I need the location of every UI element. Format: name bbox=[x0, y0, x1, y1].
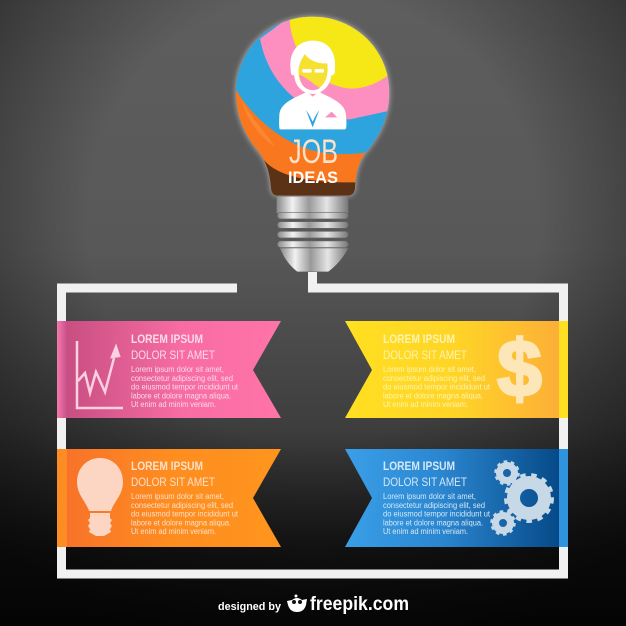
orange ribbon text: Ut enim ad minim veniam. bbox=[131, 527, 216, 536]
pink ribbon text bbox=[131, 334, 239, 409]
yellow ribbon text: consectetur adipiscing elit, sed bbox=[383, 374, 485, 383]
yellow ribbon text: Lorem ipsum dolor sit amet, bbox=[383, 365, 476, 374]
bulb colored glass bbox=[233, 13, 393, 200]
orange ribbon text: consectetur adipiscing elit, sed bbox=[131, 501, 233, 510]
orange ribbon text: DOLOR SIT AMET bbox=[131, 475, 216, 489]
pink ribbon text: do eiusmod tempor incididunt ut bbox=[131, 382, 239, 392]
blue ribbon text: DOLOR SIT AMET bbox=[383, 475, 468, 489]
footer credit: designed by bbox=[218, 601, 282, 613]
pink ribbon text: LOREM IPSUM bbox=[131, 334, 203, 346]
orange ribbon text bbox=[131, 461, 239, 536]
yellow ribbon text: Ut enim ad minim veniam. bbox=[383, 400, 468, 409]
icon: gears bbox=[492, 462, 552, 534]
blue ribbon text: Lorem ipsum dolor sit amet, bbox=[383, 492, 476, 501]
pink ribbon text: DOLOR SIT AMET bbox=[131, 348, 216, 362]
panel: orange ribbon bbox=[57, 449, 281, 547]
socket bbox=[277, 197, 348, 272]
panel: yellow ribbon bbox=[345, 321, 568, 418]
blue ribbon text bbox=[383, 461, 491, 536]
pink ribbon text: Lorem ipsum dolor sit amet, bbox=[131, 365, 224, 374]
orange ribbon text: Lorem ipsum dolor sit amet, bbox=[131, 492, 224, 501]
pink ribbon text: labore et dolore magna aliqua. bbox=[131, 392, 231, 400]
blue ribbon text: consectetur adipiscing elit, sed bbox=[383, 501, 485, 510]
icon: freepik logo bbox=[287, 594, 307, 612]
icon: light bulb bbox=[77, 458, 123, 536]
yellow ribbon text: labore et dolore magna aliqua. bbox=[383, 392, 483, 400]
orange ribbon text: LOREM IPSUM bbox=[131, 461, 203, 473]
connector frame bbox=[62, 272, 564, 574]
panel: blue ribbon bbox=[345, 449, 568, 547]
bulb label: JOB bbox=[289, 133, 338, 171]
pink ribbon text: Ut enim ad minim veniam. bbox=[131, 400, 216, 409]
bulb label bbox=[288, 133, 338, 187]
blue ribbon text: do eiusmod tempor incididunt ut bbox=[383, 510, 491, 518]
pink ribbon text: consectetur adipiscing elit, sed bbox=[131, 374, 233, 383]
yellow ribbon text bbox=[383, 334, 491, 409]
yellow ribbon text: LOREM IPSUM bbox=[383, 334, 455, 346]
footer credit bbox=[218, 594, 409, 615]
icon: businessman bbox=[279, 41, 346, 129]
light bulb bbox=[233, 13, 393, 272]
icon: dollar sign: $ bbox=[497, 324, 542, 413]
yellow ribbon text: DOLOR SIT AMET bbox=[383, 348, 468, 362]
bulb glow bbox=[236, 17, 389, 196]
yellow ribbon text: do eiusmod tempor incididunt ut bbox=[383, 382, 491, 392]
orange ribbon text: labore et dolore magna aliqua. bbox=[131, 518, 231, 528]
bulb label: IDEAS bbox=[288, 168, 338, 187]
panel: pink ribbon bbox=[57, 321, 281, 418]
footer credit: freepik.com bbox=[310, 594, 409, 615]
blue ribbon text: Ut enim ad minim veniam. bbox=[383, 527, 468, 536]
blue ribbon text: labore et dolore magna aliqua. bbox=[383, 518, 483, 528]
icon: line chart bbox=[77, 341, 123, 408]
blue ribbon text: LOREM IPSUM bbox=[383, 461, 455, 473]
orange ribbon text: do eiusmod tempor incididunt ut bbox=[131, 510, 239, 518]
